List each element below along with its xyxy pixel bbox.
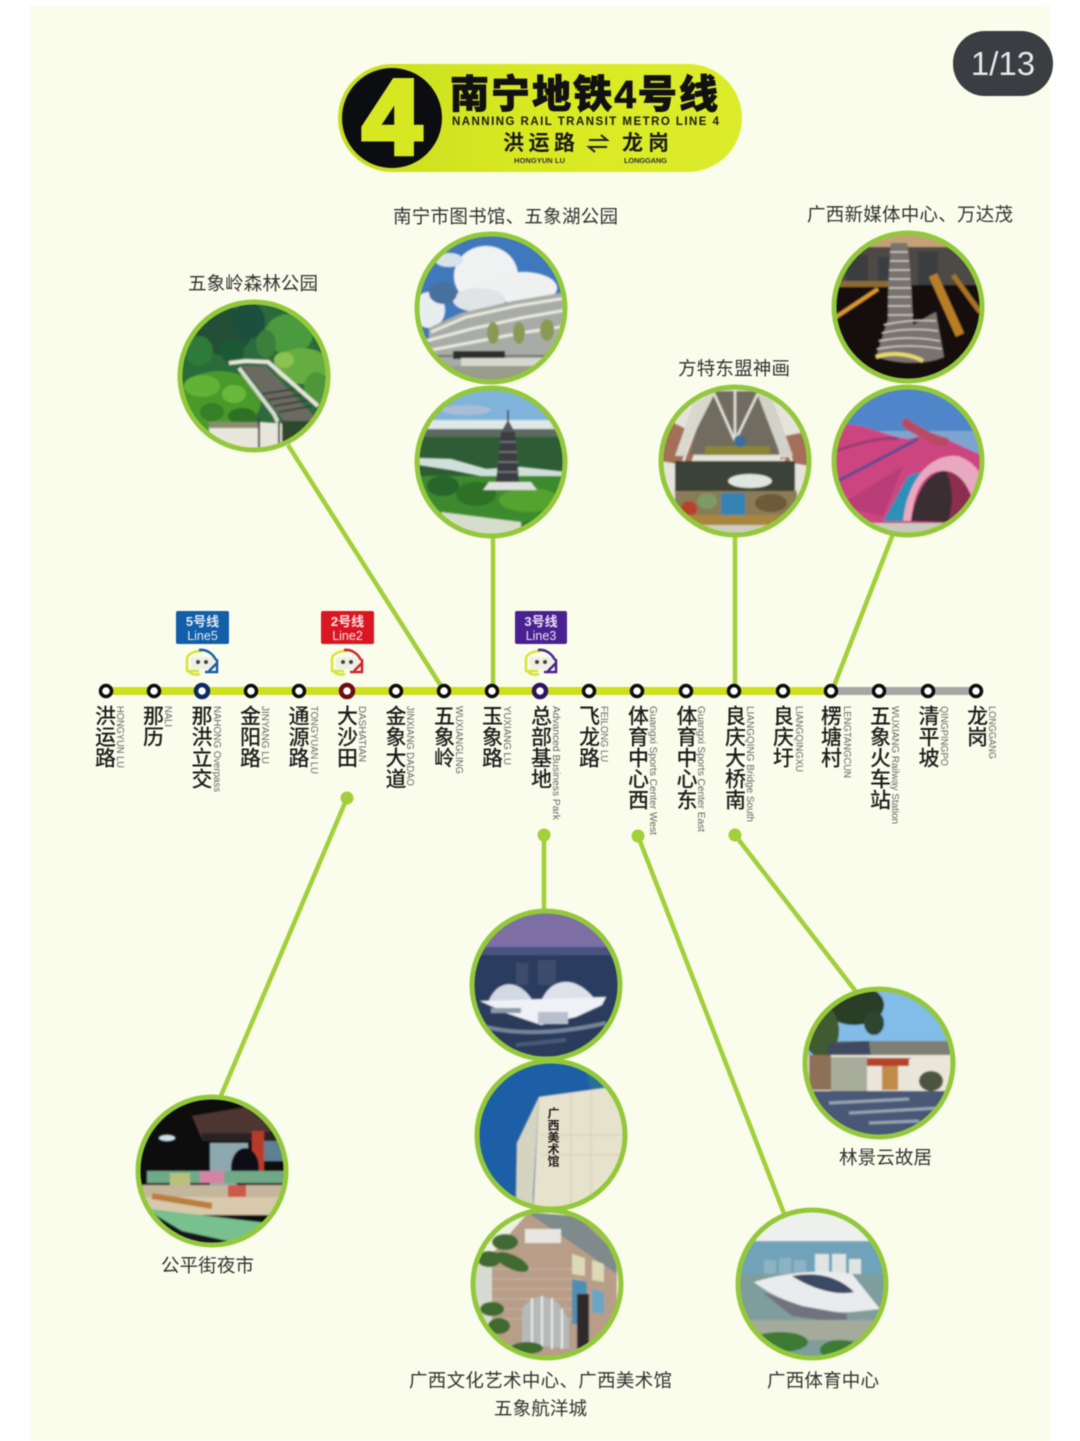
caption: forest park: 五象岭森林公园 [188,273,318,294]
station: wuxiang railway station: 五象火车站 [868,705,891,810]
connector lines [220,445,893,1216]
station: lengtangcun: 楞塘村 [818,705,842,769]
station: nali: 那历 [140,705,164,747]
station: liangqingxu: 良庆圩 [770,705,794,768]
station: nahong overpass [189,705,222,792]
station: sports center east [674,705,706,832]
station: yuxiang lu: 玉象路 [480,705,503,768]
museum sign: 广西美术馆 [546,1106,560,1167]
station: lengtangcun [818,705,852,778]
photo: wuxiang mall [467,1204,627,1364]
station: longgang: 龙岗 [964,705,988,747]
station: hongyun lu: 洪运路 [92,705,116,768]
station: advanced business park [528,705,561,821]
station: qingpingpo [916,705,949,768]
transfer badge: line 2: Line2 [332,629,363,643]
station: wuxiangling: WUXIANGLING [453,706,464,774]
icon: transfer line 3 [526,650,556,675]
station: jinxiang dadao: JINXIANG DADAO [404,706,415,786]
station: liangqingxu: LIANGQINGXU [793,706,804,772]
station: liangqing bridge south: 良庆大桥南 [722,705,746,810]
station markers [100,685,982,697]
station: wuxiang railway station [868,705,900,824]
station: wuxiang railway station: WUXIANG Railway Station [889,706,900,824]
station: wuxiangling [432,705,464,774]
station: nali [140,705,173,747]
page counter [953,31,1053,96]
icon: transfer line 2 [332,650,362,675]
station: feilong lu: FEILONG LU [598,706,609,762]
station: nahong overpass: NAHONG Overpass [211,706,222,792]
transfer badge: line 2: 2号线 [331,614,364,629]
station: jinxiang dadao: 金象大道 [383,705,406,789]
line number badge: 4 [363,59,421,176]
station: sports center east: 体育中心东 [674,705,698,810]
icon: two-way arrows [589,135,607,152]
station: tongyuan lu: 通源路 [286,705,310,768]
station: jinyang lu: 金阳路 [238,705,261,768]
station: tongyuan lu [286,705,319,774]
station: wuxiangling: 五象岭 [432,705,455,768]
caption: night market: 公平街夜市 [161,1255,254,1276]
station: nali: NALI [162,706,173,727]
station: sports center east: Guangxi Sports Center East [695,706,706,832]
page counter: 1/13 [971,45,1035,82]
photo: wanda mall arch [828,381,988,541]
caption: fantawild: 方特东盟神画 [678,358,790,379]
photo: pagoda and lake [411,382,571,546]
photo: night market [132,1091,292,1251]
photo: cultural center [466,905,626,1065]
caption: lin jingyun residence: 林景云故居 [839,1147,932,1168]
station: qingpingpo: QINGPINGPO [938,706,949,766]
station: yuxiang lu: YUXIANG LU [501,706,512,765]
station: hongyun lu: HONGYUN LU [114,706,125,768]
english title: NANNING RAIL TRANSIT METRO LINE 4 [452,116,720,128]
station: qingpingpo: 清平坡 [916,705,940,768]
photo: forest park [174,296,334,456]
photo: art museum [471,1055,631,1215]
transfer badge: line 5: 5号线 [186,614,219,629]
caption: sports center: 广西体育中心 [767,1370,879,1391]
terminus english: longgang: LONGGANG [624,156,667,165]
metro line track [106,687,976,695]
photo: library [411,228,571,388]
photo: fantawild asean park [655,381,815,541]
station: dashatian: DASHATIAN [356,706,367,762]
photo: sports center [732,1204,892,1364]
transfer badge: line 5 [176,611,229,644]
station: jinyang lu: JINYANG LU [259,706,270,764]
station: longgang [964,705,997,759]
title text: 南宁地铁4号线 [450,74,718,117]
caption: culture center and art museum: 广西文化艺术中心、广西美术馆 [409,1370,672,1391]
station: nahong overpass: 那洪立交 [189,705,212,789]
station: lengtangcun: LENGTANGCUN [841,706,852,778]
transfer badge: line 3 [515,611,567,644]
station: sports center west: 体育中心西 [626,705,649,810]
station: longgang: LONGGANG [986,706,997,759]
station: sports center west: Guangxi Sports Center West [647,706,658,835]
station: feilong lu: 飞龙路 [576,705,600,768]
transfer badge: line 3: 3号线 [524,614,558,629]
photo: media center tower [828,227,988,387]
terminus english: hongyun lu: HONGYUN LU [514,156,565,165]
station: advanced business park: Advanced Business Park [550,706,561,821]
caption: library and lake park: 南宁市图书馆、五象湖公园 [393,206,618,227]
station: liangqing bridge south [722,705,755,822]
line number badge [342,59,442,176]
station: liangqingxu [770,705,804,772]
caption: media center and wanda: 广西新媒体中心、万达茂 [807,204,1013,225]
photo: lin jingyun former residence [799,983,959,1141]
terminus: longgang: 龙岗 [622,132,669,155]
transfer badge: line 2 [321,611,374,644]
station: tongyuan lu: TONGYUAN LU [308,706,319,774]
station: dashatian: 大沙田 [334,705,358,768]
caption: ocean mall: 五象航洋城 [494,1398,587,1419]
title banner [338,59,742,176]
station: advanced business park: 总部基地 [528,705,552,789]
station: sports center west [626,705,658,835]
icon: transfer line 5 [187,650,217,675]
transfer badge: line 5: Line5 [187,629,218,643]
transfer badge: line 3: Line3 [526,629,556,643]
station: liangqing bridge south: LIANGQING Bridge South [744,706,755,822]
station names [92,705,997,835]
termini: 洪运路 [503,132,575,155]
